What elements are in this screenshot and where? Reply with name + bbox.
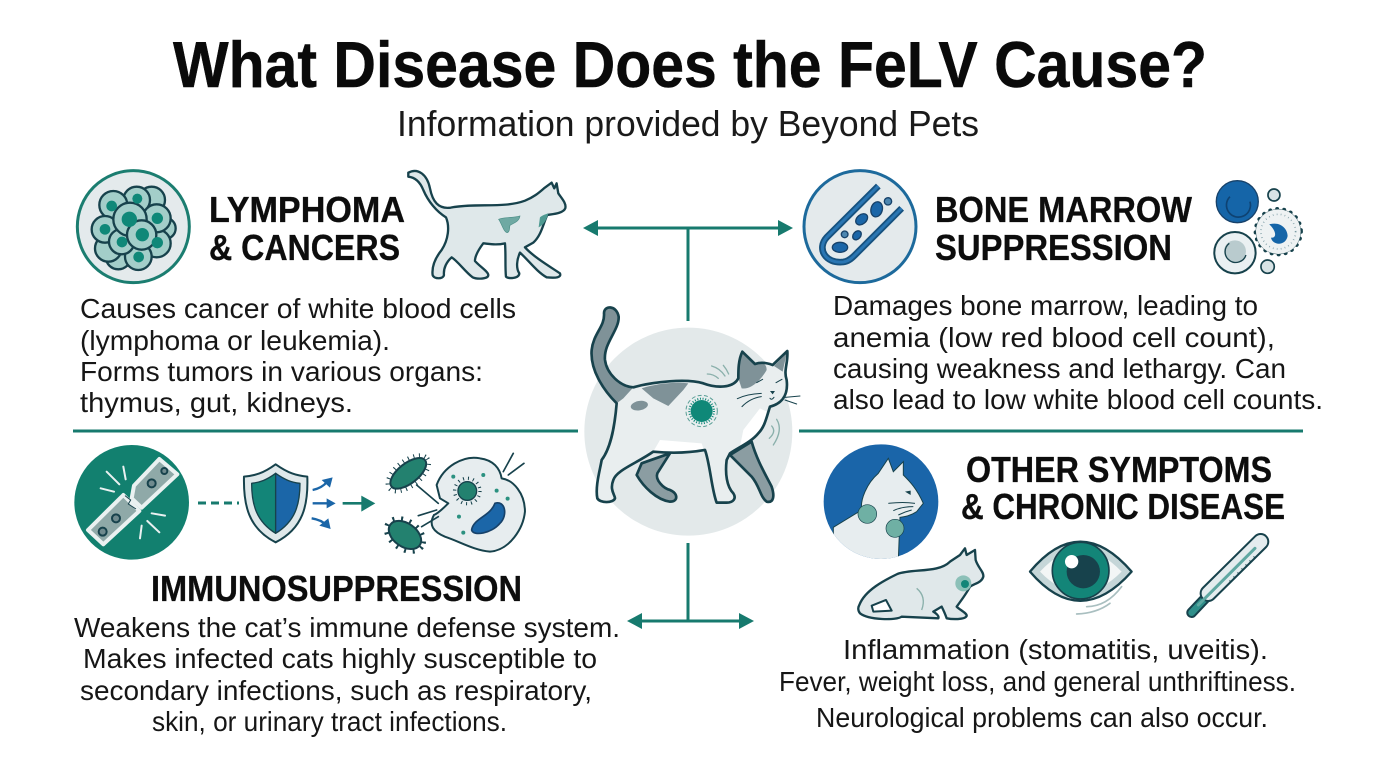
panel: other symptoms and chronic disease <box>779 444 1296 733</box>
icon: crouching cat <box>858 548 983 619</box>
icon: shield with arrows <box>244 464 375 542</box>
icon: blood cells <box>1214 181 1301 273</box>
text: immunosuppression description <box>74 612 620 737</box>
text: other symptoms description: Neurological problems can also occur. <box>816 702 1268 733</box>
heading: other symptoms and chronic disease: OTHER SYMPTOMS <box>966 449 1272 490</box>
text: bone marrow description: causing weakness and lethargy. Can <box>833 353 1286 384</box>
panel: lymphoma and cancers <box>77 171 566 418</box>
text: immunosuppression description: secondary infections, such as respiratory, <box>80 675 592 706</box>
text: lymphoma description: thymus, gut, kidneys. <box>80 387 353 418</box>
arrow to infections <box>343 496 375 512</box>
icon: cat head with swollen glands <box>824 444 938 560</box>
text: lymphoma description <box>80 293 516 418</box>
icon: damaged blood vessel <box>74 445 189 560</box>
heading: bone marrow suppression: BONE MARROW <box>935 189 1192 230</box>
heading: lymphoma and cancers <box>209 189 405 268</box>
heading: bone marrow suppression <box>935 189 1192 268</box>
text: lymphoma description: Causes cancer of white blood cells <box>80 293 516 324</box>
connector lines and arrows <box>73 220 1303 629</box>
text: lymphoma description: (lymphoma or leukemia). <box>80 325 390 356</box>
heading: lymphoma and cancers: & CANCERS <box>209 227 400 268</box>
panel: immunosuppression <box>74 445 620 737</box>
icon: inflamed eye <box>1030 542 1132 614</box>
heading: immunosuppression: IMMUNOSUPPRESSION <box>151 568 522 609</box>
icon: bone marrow cross-section <box>804 171 916 283</box>
text: immunosuppression description: Weakens the cat’s immune defense system. <box>74 612 620 643</box>
heading: bone marrow suppression: SUPPRESSION <box>935 227 1172 268</box>
icon: bacteria attacking cell <box>380 449 525 558</box>
subtitle: Information provided by Beyond Pets <box>397 103 979 144</box>
text: bone marrow description: Damages bone marrow, leading to <box>833 290 1258 321</box>
text: bone marrow description <box>833 290 1323 415</box>
text: other symptoms description: Fever, weight loss, and general unthriftiness. <box>779 666 1296 697</box>
text: immunosuppression description: Makes infected cats highly susceptible to <box>83 643 597 674</box>
text: immunosuppression description: skin, or urinary tract infections. <box>152 706 507 737</box>
dashed link <box>198 502 239 504</box>
title: What Disease Does the FeLV Cause? <box>173 28 1207 101</box>
text: other symptoms description: Inflammation (stomatitis, uveitis). <box>843 634 1268 665</box>
text: bone marrow description: anemia (low red blood cell count), <box>833 322 1275 353</box>
icon: cat with tumors <box>408 171 566 279</box>
text: other symptoms description <box>779 634 1296 733</box>
center illustration: infected cat <box>584 307 800 536</box>
heading: other symptoms and chronic disease <box>961 449 1285 527</box>
icon: thermometer <box>1192 542 1261 613</box>
text: bone marrow description: also lead to low white blood cell counts. <box>833 384 1323 415</box>
icon: lymphoma cell cluster <box>77 171 189 283</box>
panel: bone marrow suppression <box>804 171 1323 415</box>
heading: lymphoma and cancers: LYMPHOMA <box>209 189 405 230</box>
heading: other symptoms and chronic disease: & CHRONIC DISEASE <box>961 486 1285 527</box>
text: lymphoma description: Forms tumors in various organs: <box>80 356 483 387</box>
